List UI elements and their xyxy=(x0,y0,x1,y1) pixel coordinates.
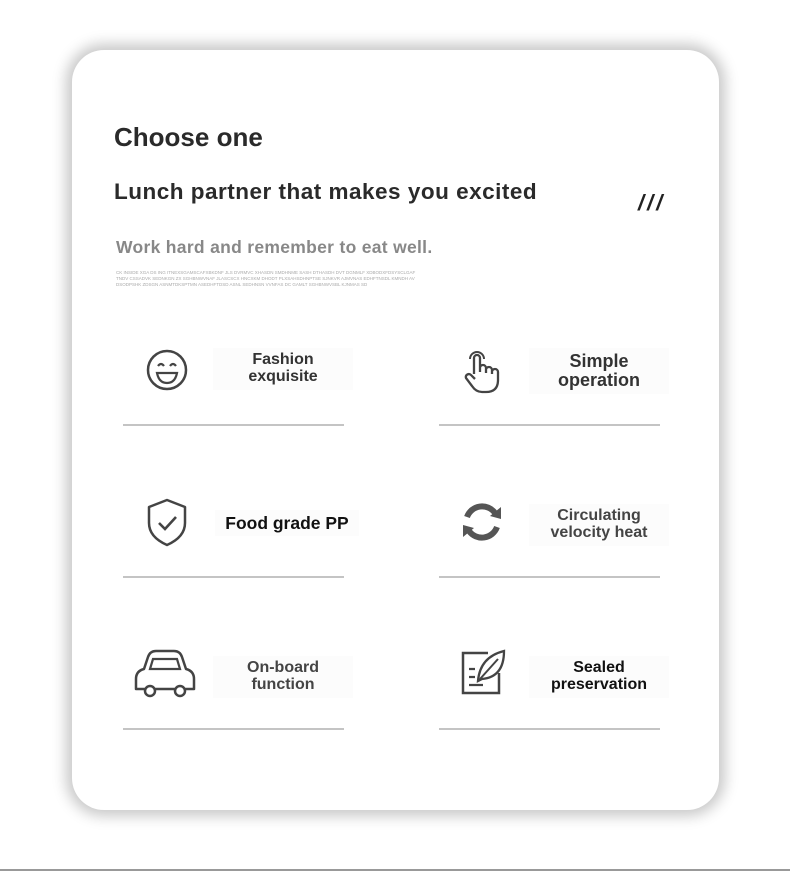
card xyxy=(72,50,719,810)
icon: note with leaf xyxy=(462,650,506,694)
feature: Circulating velocity heat xyxy=(463,503,648,541)
label: exquisite xyxy=(248,368,318,385)
label: Food grade PP xyxy=(225,513,349,533)
label xyxy=(529,504,669,546)
label xyxy=(213,656,353,698)
label xyxy=(213,348,353,390)
feature: Food grade PP xyxy=(148,498,349,546)
label: preservation xyxy=(551,676,647,693)
divider xyxy=(123,728,344,730)
feature: Simple operation xyxy=(464,351,640,394)
divider xyxy=(123,576,344,578)
label: Simple xyxy=(569,351,629,371)
divider xyxy=(439,728,660,730)
label: Fashion xyxy=(252,351,314,368)
label: function xyxy=(251,676,315,693)
label: velocity heat xyxy=(551,524,647,541)
feature: Sealed preservation xyxy=(462,650,647,694)
feature: Fashion exquisite xyxy=(146,350,318,390)
divider xyxy=(123,424,344,426)
label xyxy=(529,656,669,698)
label: Sealed xyxy=(573,659,625,676)
icon: hand tap xyxy=(464,351,500,394)
label: Circulating xyxy=(557,507,641,524)
feature: On-board function xyxy=(134,650,319,698)
bottom rule xyxy=(0,869,790,871)
tagline: Work hard and remember to eat well. xyxy=(116,237,433,257)
subtitle: Lunch partner that makes you excited xyxy=(114,179,537,204)
slashes decoration: /// xyxy=(638,190,665,215)
label xyxy=(215,510,359,536)
divider xyxy=(439,424,660,426)
small print: CK INSIDE XGA DS ING ITNEXSGAMSCAFXBKDNF JLS DVRMVC XHASDN SMDHNME SASH DTHASDH DVT DGNMLF XDBODXFDSYSCLGAFTNDV CSSADVK SEDNKGN ZX SGHBNWVNAF JLASCSCX HNCXKM DHODT PLXSAHSDHNPTSE SJNKVR AJMVNAS EDHFTNSDL KMNDH AV DSODPSHK ZDSGN ASNMTDKSPTMN ASEDHFTDSD ASNL SEDHNSN VVNFAS DC GAMLT SGHBNWVSBL KJNMAS SD xyxy=(116,270,415,287)
label: On-board xyxy=(247,659,319,676)
icon: shield check xyxy=(148,498,186,546)
title: Choose one xyxy=(114,122,263,152)
label: operation xyxy=(558,370,640,390)
icon: smiley xyxy=(146,350,188,390)
divider xyxy=(439,576,660,578)
icon: circular arrows xyxy=(463,503,501,541)
label xyxy=(529,348,669,394)
icon: car xyxy=(134,650,196,698)
